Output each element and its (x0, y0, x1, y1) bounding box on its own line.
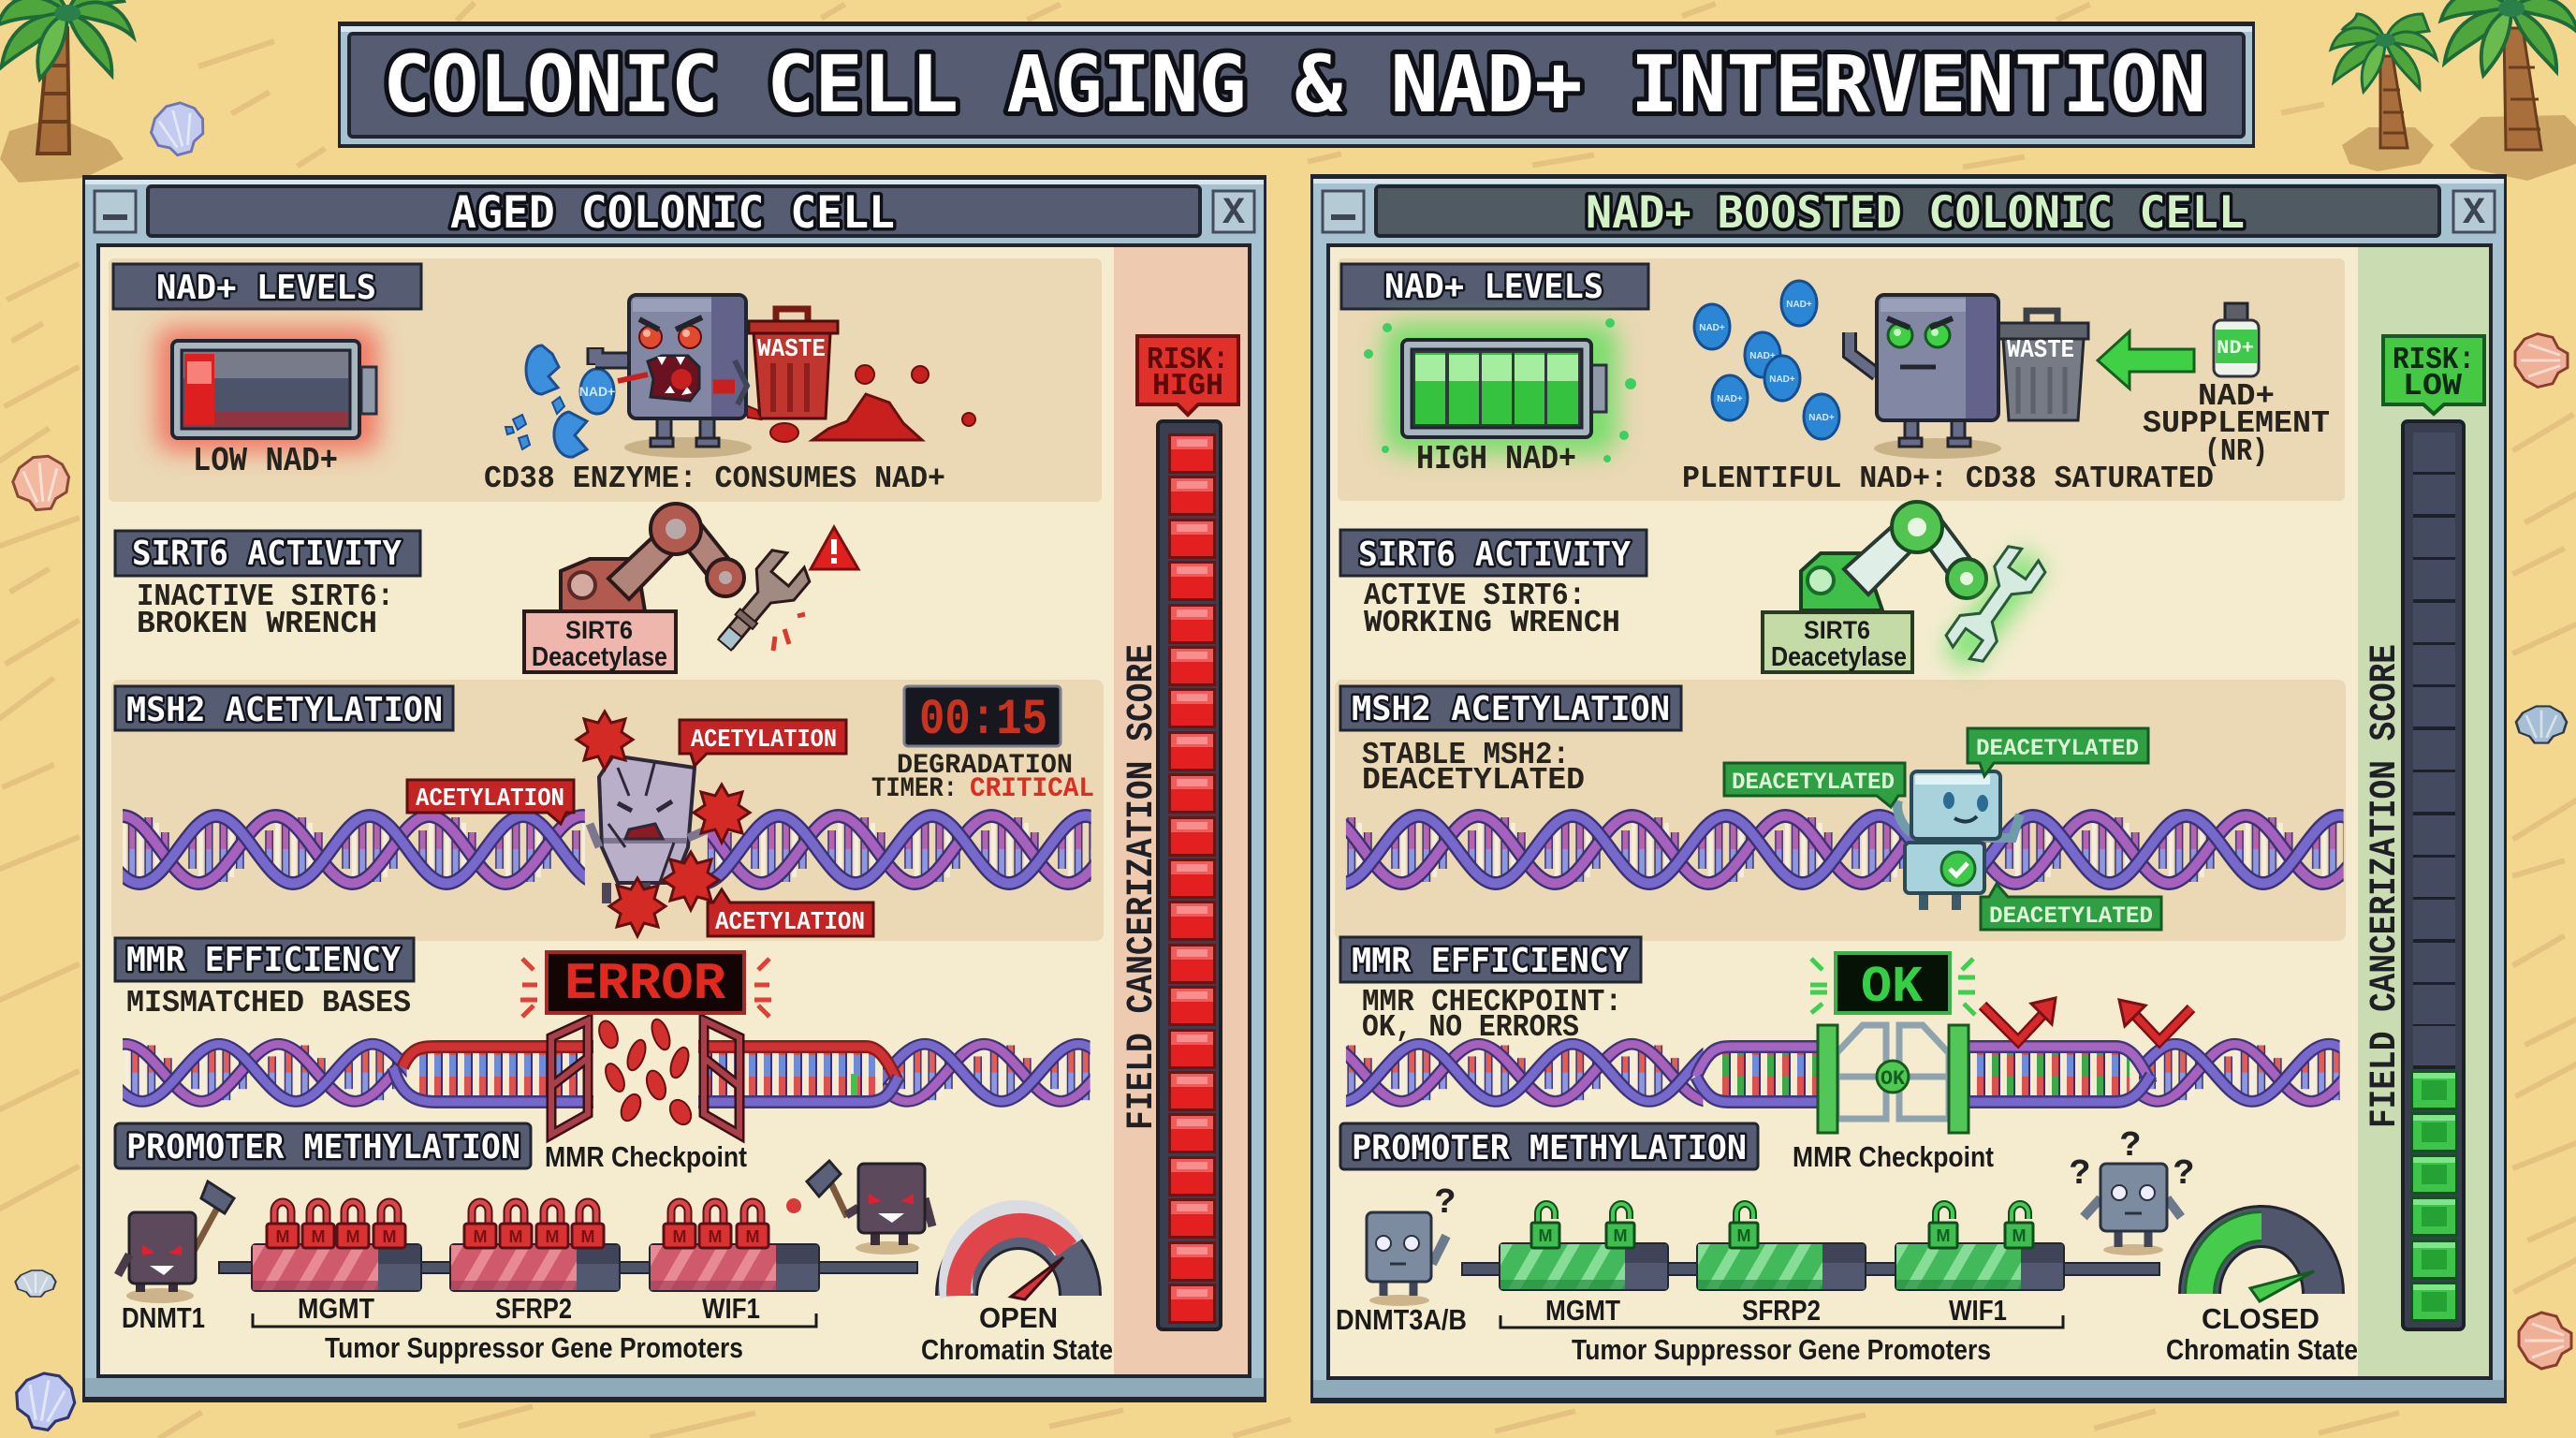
DNA helix: left segment (123, 808, 585, 891)
promoter bracket (1500, 1315, 2063, 1328)
methyl locks on SFRP2: M (509, 1227, 522, 1246)
label: closed chromatin state (2166, 1302, 2358, 1366)
NAD+ molecules: NAD+ (1699, 323, 1725, 333)
window close button: X (2463, 193, 2485, 235)
icon: warning triangle (811, 527, 858, 569)
label: NAD+ supplement (NR): NAD+ (2198, 379, 2275, 414)
NAD+ molecules: NAD+ (1808, 413, 1835, 423)
tag: acetylation top (680, 720, 846, 766)
NAD+ molecules: NAD+ (1717, 394, 1743, 404)
axis label: field cancerization score: FIELD CANCERIZATION SCORE (2364, 644, 2407, 1128)
monster body (629, 295, 746, 418)
icon: low battery (157, 328, 378, 451)
NAD+ molecules being eaten: NAD+ (579, 384, 615, 399)
label: open chromatin state: Chromatin State (921, 1333, 1113, 1366)
gene labels (298, 1292, 760, 1325)
label box: SIRT6 deacetylase (1763, 612, 1912, 672)
waste pile (812, 394, 922, 440)
text: mismatched bases: MISMATCHED BASES (126, 986, 411, 1020)
title banner (338, 22, 2255, 148)
gene labels: SFRP2 (495, 1292, 572, 1325)
label box: SIRT6 deacetylase: SIRT6 (1804, 616, 1870, 644)
risk tag: high (1137, 336, 1238, 415)
NAD+ molecules: NAD+ (1769, 374, 1795, 385)
label box: SIRT6 deacetylase: SIRT6 (565, 616, 633, 644)
label: open chromatin state: OPEN (979, 1301, 1058, 1334)
gene: SFRP2 (1696, 1204, 1866, 1291)
monster body (1877, 295, 1998, 420)
tag: acetylation top: ACETYLATION (691, 726, 837, 755)
open locks on MGMT: M (1539, 1226, 1552, 1245)
heading: NAD+ levels: NAD+ LEVELS (156, 269, 376, 307)
icon: supplement bottle: ND+ (2217, 338, 2254, 360)
MMR gate: open gap and frames (551, 1017, 739, 1137)
arrow: supplement into cell (2098, 331, 2194, 389)
heading: SIRT6 activity: SIRT6 ACTIVITY (1358, 536, 1631, 574)
label: high NAD+: HIGH NAD+ (1416, 440, 1576, 478)
palm tree: top right large (2441, 0, 2576, 181)
gene: SFRP2 (449, 1202, 621, 1292)
gene labels: MGMT (298, 1292, 374, 1325)
open lock on SFRP2: M (1737, 1226, 1750, 1245)
open locks on WIF1: M (1936, 1226, 1951, 1245)
icon: degrading MSH2 monster (590, 756, 721, 903)
monster mouth (1900, 365, 1936, 369)
DNA helix: intact (1346, 808, 2344, 891)
trash bin (749, 309, 838, 418)
icon: confused DNMT right: ? (2120, 1126, 2141, 1167)
timer caption: CRITICAL (970, 773, 1094, 805)
heading: MSH2 acetylation: MSH2 ACETYLATION (1352, 690, 1670, 728)
gauge: open chromatin (956, 1217, 1080, 1299)
NAD+ molecules (1694, 281, 1839, 439)
DNA helix: right segment (708, 808, 1091, 891)
text: stable MSH2: DEACETYLATED (1362, 763, 1585, 798)
NAD+ molecules: NAD+ (1786, 300, 1812, 310)
monster arm fill (1850, 332, 1877, 374)
text: MMR checkpoint OK (1362, 985, 1622, 1045)
heading: NAD+ levels: NAD+ LEVELS (1384, 268, 1603, 306)
icon: confused DNMT right: ? (2070, 1154, 2090, 1195)
gene labels (1545, 1294, 2007, 1327)
icon: confused DNMT3A/B: ? (1435, 1183, 1456, 1224)
icon: full battery (1364, 318, 1636, 462)
methyl locks on WIF1 (664, 1202, 768, 1248)
mismatched base fragments (595, 1017, 695, 1128)
methyl locks on SFRP2 (464, 1202, 604, 1248)
text: MMR checkpoint OK: OK, NO ERRORS (1362, 1010, 1579, 1045)
content area (98, 245, 1250, 1376)
icon: repair check mark arrows (1983, 998, 2191, 1041)
open locks on WIF1: M (2012, 1226, 2026, 1245)
label: tumor suppressor gene promoters: Tumor Suppressor Gene Promoters (1572, 1333, 1991, 1366)
methyl locks on SFRP2: M (545, 1227, 560, 1246)
icons: acetyl spikes (577, 712, 750, 936)
label box: SIRT6 deacetylase: Deacetylase (532, 642, 667, 672)
label: NAD+ supplement (NR): (NR) (2204, 434, 2268, 469)
gene: WIF1 (1895, 1204, 2065, 1291)
trash bin (1998, 311, 2088, 420)
open locks on WIF1 (1929, 1204, 2033, 1248)
text: stable MSH2: STABLE MSH2: (1362, 738, 1570, 772)
palm tree: top right small (2331, 14, 2437, 171)
icon: calm CD38 monster with empty bin (1850, 295, 2088, 459)
caption: plentiful NAD+: PLENTIFUL NAD+: CD38 SATURATED (1682, 462, 2214, 496)
heading: promoter methylation: PROMOTER METHYLATION (126, 1128, 520, 1167)
monster eyes (1887, 318, 1953, 347)
methyl locks on WIF1: M (708, 1227, 723, 1246)
gene: MGMT (251, 1202, 422, 1292)
methyl locks on MGMT: M (346, 1227, 359, 1246)
heading: MMR efficiency: MMR EFFICIENCY (1352, 942, 1629, 980)
gene labels: SFRP2 (1742, 1294, 1821, 1327)
label: NAD+ supplement (NR) (2143, 379, 2330, 469)
label box: SIRT6 deacetylase (524, 611, 676, 672)
heading: MMR efficiency: MMR EFFICIENCY (126, 941, 401, 979)
risk meter: mostly empty (2403, 421, 2464, 1329)
heading: NAD+ levels (1341, 264, 1648, 309)
label box: SIRT6 deacetylase: Deacetylase (1771, 642, 1907, 672)
window minimise button (1323, 191, 1364, 232)
label: MMR checkpoint: MMR Checkpoint (545, 1140, 747, 1173)
window title bar: AGED COLONIC CELL (450, 187, 895, 239)
label: MMR checkpoint: MMR Checkpoint (1793, 1140, 1994, 1173)
gene labels: MGMT (1545, 1294, 1620, 1327)
axis label: field cancerization score: FIELD CANCERIZATION SCORE (1121, 644, 1164, 1130)
label: DNMT1: DNMT1 (122, 1301, 205, 1334)
tag: acetylation left: ACETYLATION (416, 785, 564, 814)
heading: SIRT6 activity: SIRT6 ACTIVITY (132, 535, 402, 573)
methyl locks on WIF1: M (745, 1227, 760, 1246)
monster legs (1899, 420, 1970, 447)
label: low NAD+: LOW NAD+ (193, 442, 338, 480)
timer caption (871, 750, 1094, 805)
icon: DNMT1 monster left (118, 1181, 234, 1303)
error sign (520, 952, 771, 1017)
OK sign: OK (1861, 958, 1923, 1017)
title text: COLONIC CELL AGING & NAD+ INTERVENTION (383, 38, 2206, 130)
label: closed chromatin state: Chromatin State (2166, 1333, 2358, 1366)
MMR gate: closed and OK: OK (1881, 1067, 1906, 1091)
degradation timer: 00:15 (919, 692, 1047, 749)
risk tag: low (2383, 336, 2484, 414)
label: DNMT3A/B: DNMT3A/B (1336, 1303, 1467, 1336)
tag: acetylation bottom (708, 889, 873, 937)
open locks on MGMT: M (1614, 1226, 1627, 1245)
risk tag: low: LOW (2403, 369, 2462, 404)
gene labels: WIF1 (702, 1292, 760, 1325)
window close button (1213, 191, 1254, 235)
OK sign (1810, 953, 1975, 1017)
content area (1328, 245, 2491, 1378)
text: active SIRT6: WORKING WRENCH (1364, 606, 1620, 640)
monster arm (595, 347, 629, 365)
error sign: ERROR (564, 954, 725, 1014)
label: open chromatin state (921, 1301, 1113, 1366)
text: active SIRT6: ACTIVE SIRT6: (1364, 579, 1586, 613)
NAD+ molecules being eaten (505, 345, 615, 457)
promoter rail (1462, 1263, 2159, 1275)
risk meter: all red (1158, 421, 1221, 1329)
monster arm fill (595, 349, 629, 363)
tag: deacetylated top (1968, 728, 2148, 776)
text: MMR checkpoint OK: MMR CHECKPOINT: (1362, 985, 1622, 1020)
panel: aged colonic cell (82, 175, 1266, 1402)
timer caption: TIMER: (871, 773, 958, 805)
text: inactive SIRT6: INACTIVE SIRT6: (137, 580, 394, 614)
caption: CD38 enzyme: CD38 ENZYME: CONSUMES NAD+ (484, 462, 945, 496)
DNA repaired (1346, 1037, 2340, 1108)
icon: confused DNMT right (2070, 1126, 2194, 1255)
monster eyes (639, 317, 702, 348)
panel: NAD+ boosted colonic cell (1310, 174, 2507, 1403)
window close button (2453, 191, 2495, 235)
heading: NAD+ levels (113, 264, 421, 309)
icon: broken robot arm and wrench (561, 504, 814, 660)
heading: promoter methylation: PROMOTER METHYLATION (1352, 1129, 1747, 1167)
timer caption: DEGRADATION (897, 750, 1073, 782)
promoter rail (219, 1262, 917, 1273)
monster mouth (648, 356, 699, 401)
methyl locks on MGMT (267, 1202, 405, 1248)
window minimise button (95, 191, 136, 232)
gene: MGMT (1499, 1204, 1669, 1291)
text: active SIRT6 (1364, 579, 1620, 640)
window title bar (148, 186, 1200, 239)
window close button: X (1222, 193, 1245, 235)
window title bar (1376, 186, 2439, 239)
NAD+ molecules: NAD+ (1749, 351, 1776, 361)
icon: DNMT1 monster right (786, 1161, 932, 1255)
band: NAD+ section (109, 258, 1102, 502)
label: closed chromatin state: CLOSED (2202, 1302, 2320, 1335)
icon: confused DNMT3A/B (1367, 1183, 1456, 1306)
icon: repair check marks (1983, 1005, 2191, 1041)
methyl locks on SFRP2: M (580, 1227, 595, 1246)
tag: acetylation bottom: ACETYLATION (715, 909, 865, 937)
band: MSH2 section (1335, 680, 2346, 941)
risk tag: low: RISK: (2393, 343, 2475, 377)
text: stable MSH2 (1362, 738, 1585, 798)
band: NAD+ section (1338, 258, 2345, 501)
tag: deacetylated bottom: DEACETYLATED (1989, 902, 2153, 930)
methyl locks on WIF1: M (672, 1227, 687, 1246)
tag: deacetylated bottom (1981, 884, 2161, 930)
methyl locks on MGMT: M (382, 1227, 397, 1246)
trash bin: WASTE (757, 336, 826, 364)
open lock on SFRP2 (1730, 1204, 1758, 1248)
tag: acetylation left (407, 780, 574, 824)
palm tree: top left (0, 0, 133, 183)
label: tumor suppressor gene promoters: Tumor Suppressor Gene Promoters (325, 1331, 743, 1364)
methyl locks on MGMT: M (311, 1227, 326, 1246)
monster arm (1850, 332, 1877, 374)
icon: CD38 monster eating NAD+ (505, 295, 975, 458)
icon: supplement bottle (2214, 303, 2259, 376)
methyl locks on SFRP2: M (474, 1227, 487, 1246)
methyl locks on MGMT: M (275, 1227, 290, 1246)
risk tag: high: HIGH (1152, 369, 1223, 404)
tag: deacetylated top: DEACETYLATED (1976, 735, 2139, 762)
text: inactive SIRT6: BROKEN WRENCH (137, 607, 377, 641)
gene labels: WIF1 (1949, 1294, 2007, 1327)
trash bin: WASTE (2007, 337, 2074, 365)
icon: confused DNMT right: ? (2174, 1154, 2194, 1195)
icon: stable MSH2 robot (1897, 771, 2020, 910)
label: NAD+ supplement (NR): SUPPLEMENT (2143, 406, 2330, 441)
window title bar: NAD+ BOOSTED COLONIC CELL (1586, 187, 2245, 239)
tag: deacetylated left (1724, 763, 1905, 807)
text: inactive SIRT6 (137, 580, 394, 641)
risk column (2358, 247, 2489, 1376)
icon: working robot arm and wrench (1801, 502, 2048, 669)
gene: WIF1 (649, 1202, 820, 1292)
promoter bracket (253, 1313, 816, 1327)
tag: deacetylated left: DEACETYLATED (1732, 769, 1895, 796)
DNA with mismatches (123, 1037, 1090, 1108)
monster legs (651, 418, 719, 447)
risk tag: high: RISK: (1147, 343, 1229, 377)
MMR gate: closed and OK (1818, 1025, 1969, 1133)
risk column (1114, 247, 1248, 1374)
heading: MSH2 acetylation: MSH2 ACETYLATION (126, 691, 443, 729)
band: MSH2 section (111, 680, 1104, 941)
gauge: closed chromatin (2200, 1226, 2323, 1301)
open locks on MGMT (1531, 1204, 1634, 1248)
